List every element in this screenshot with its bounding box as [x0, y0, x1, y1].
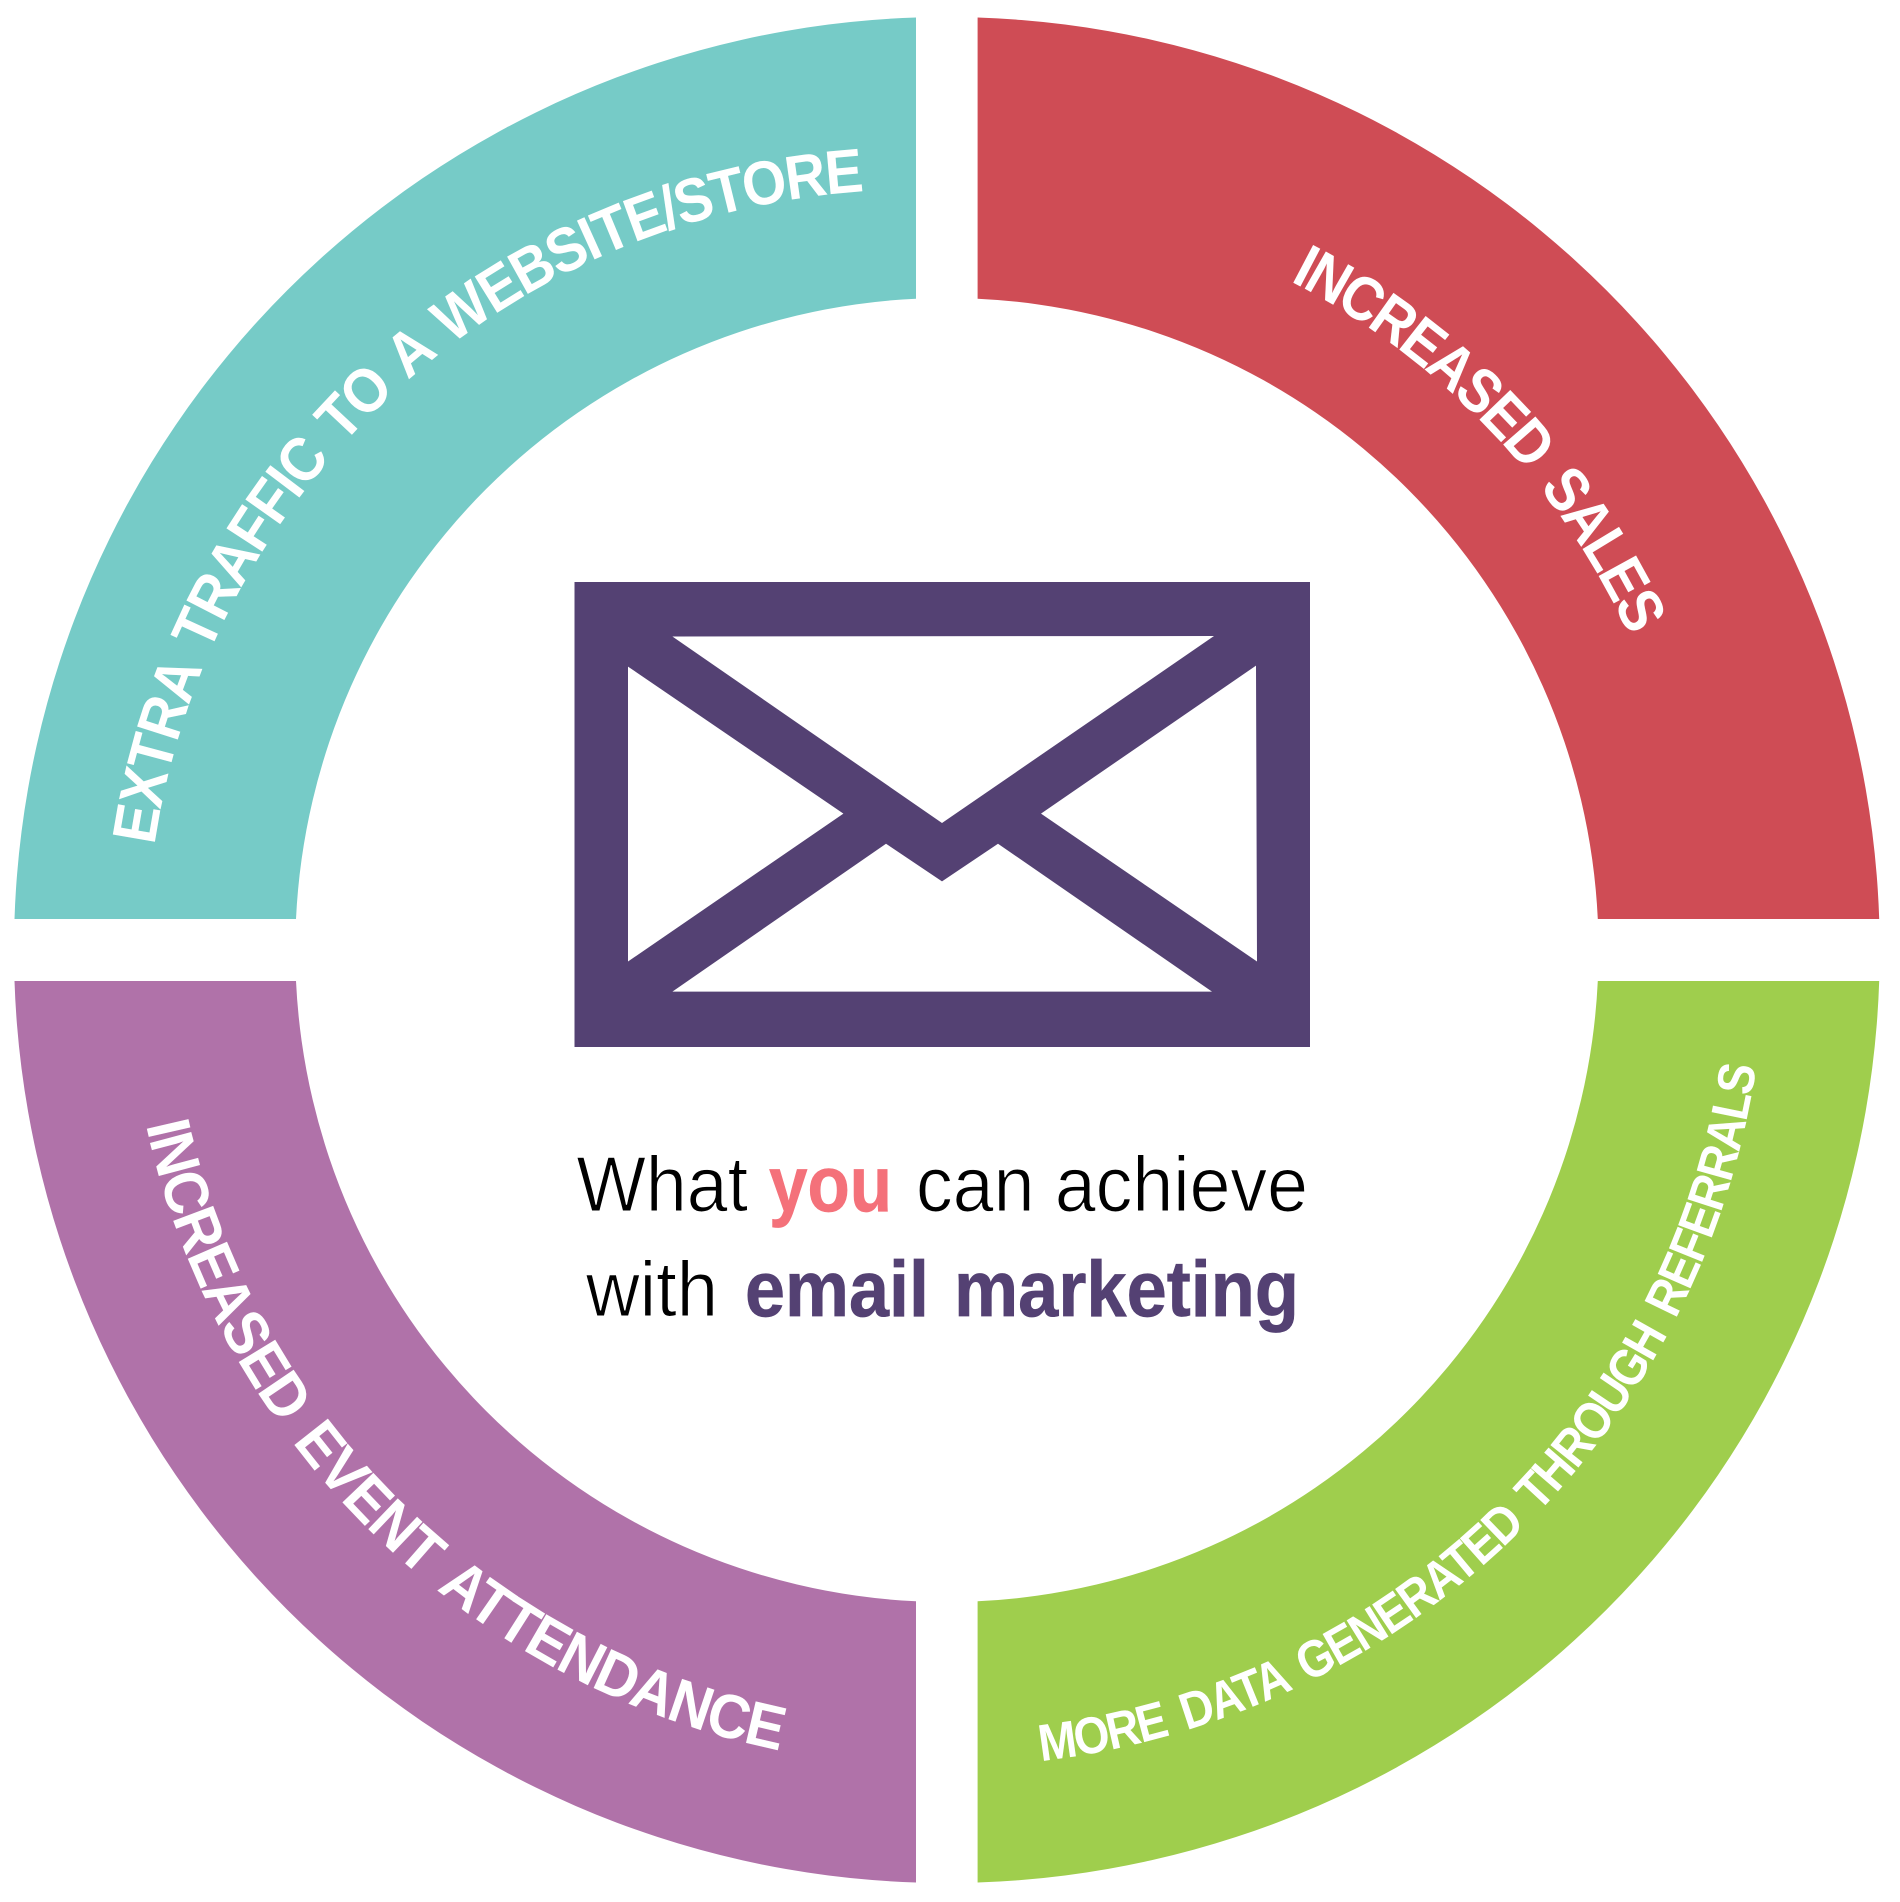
heading: [576, 1139, 1308, 1333]
heading line one: can achieve: [916, 1140, 1308, 1228]
heading line two: with: [585, 1245, 718, 1333]
panel: more data: [978, 981, 1880, 1882]
heading line two: [585, 1244, 1299, 1333]
heading line one: you: [769, 1139, 892, 1228]
teal ring segment: [14, 18, 916, 919]
heading line two: email: [745, 1244, 929, 1333]
heading line one: What: [576, 1140, 748, 1228]
panel: extra traffic: [14, 18, 916, 919]
red ring segment: [978, 18, 1879, 919]
label: event attendance: INCREASED EVENT ATTENDANCE: [146, 1119, 786, 1750]
heading line one: [576, 1139, 1308, 1228]
green ring segment: [978, 981, 1879, 1882]
icon: envelope: [574, 582, 1310, 1047]
label: extra traffic: EXTRA TRAFFIC TO A WEBSITE/STORE: [112, 148, 862, 842]
purple ring segment: [14, 981, 916, 1882]
panel: increased sales: [978, 18, 1880, 919]
heading line two: marketing: [954, 1244, 1299, 1333]
panel: increased event attendance: [14, 981, 916, 1882]
label: more data: MORE DATA GENERATED THROUGH REFERRALS: [1039, 1064, 1755, 1761]
label: increased sales: INCREASED SALES: [1293, 245, 1664, 630]
